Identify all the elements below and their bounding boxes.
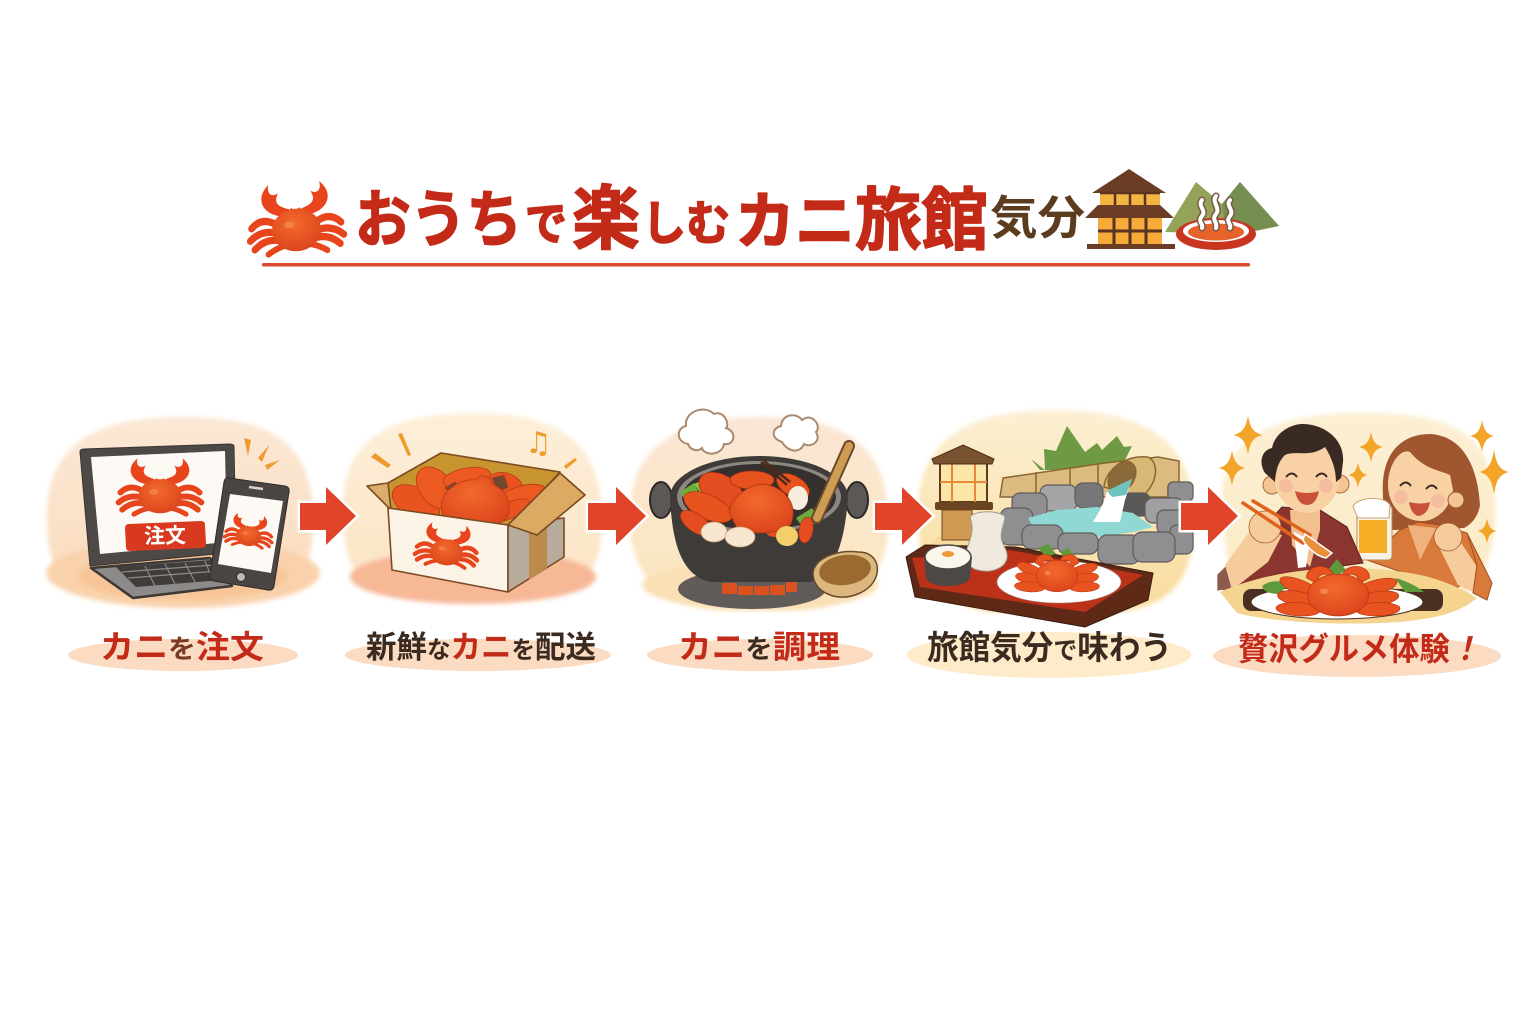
illustration: man bbox=[1218, 424, 1363, 590]
step label 1 bbox=[68, 629, 298, 671]
order button bbox=[125, 521, 206, 551]
icon: serving tray bbox=[906, 545, 1153, 627]
title text bbox=[355, 180, 1085, 259]
icon: waterfall bbox=[1093, 479, 1132, 522]
icon: bamboo water pipe bbox=[1000, 456, 1179, 498]
title text: おうち bbox=[355, 186, 522, 255]
order button: 注文 bbox=[144, 524, 186, 549]
icon: stove bbox=[678, 569, 826, 609]
icon: laptop bbox=[80, 444, 236, 598]
icon: attention rays bbox=[244, 438, 280, 470]
icon: mountains bbox=[1165, 182, 1279, 234]
step label 2: 新鮮なカニを配送 bbox=[366, 630, 596, 665]
icon: sparkle rays bbox=[371, 433, 577, 469]
title text: 楽 bbox=[572, 180, 640, 258]
step label 5: 贅沢グルメ体験！ bbox=[1238, 631, 1480, 667]
step label 1: カニを注文 bbox=[100, 629, 264, 665]
panel: order crab bbox=[46, 417, 320, 608]
step label 3 bbox=[647, 629, 873, 671]
icon: stone lantern bbox=[929, 445, 1000, 560]
icon: wooden bowl bbox=[813, 552, 877, 597]
step label 4 bbox=[907, 629, 1191, 678]
arrow 2 bbox=[588, 487, 646, 545]
icon: sake cup bbox=[924, 545, 972, 586]
panel: ryokan atmosphere bbox=[906, 410, 1194, 627]
arrow 1 bbox=[300, 487, 356, 545]
icon: green bushes bbox=[1031, 426, 1132, 470]
icon: sake bottle bbox=[966, 512, 1007, 571]
icon: crab bbox=[247, 179, 345, 256]
icon: sparkles bbox=[1219, 416, 1508, 544]
ladle handle fill bbox=[817, 446, 849, 518]
title text: 気分 bbox=[990, 192, 1085, 244]
icon: smartphone bbox=[210, 478, 289, 590]
arrow 4 bbox=[1181, 487, 1238, 545]
title text: 旅館 bbox=[855, 183, 988, 259]
icon: crab platter bbox=[1243, 559, 1443, 619]
panel: gourmet experience bbox=[1218, 413, 1508, 624]
panel: delivery bbox=[343, 413, 602, 604]
step label 3: カニを調理 bbox=[678, 629, 840, 665]
title text: カニ bbox=[735, 188, 855, 257]
icon: open box with crabs bbox=[367, 453, 585, 592]
icon: ryokan building bbox=[1085, 169, 1175, 249]
crab logo bbox=[414, 521, 481, 569]
title banner bbox=[247, 169, 1279, 266]
pot contents bbox=[676, 465, 820, 547]
step label 5 bbox=[1213, 631, 1501, 677]
title underline bbox=[262, 263, 1250, 266]
icon: music note: ♫ bbox=[525, 426, 552, 461]
title text: しむ bbox=[642, 197, 730, 250]
icon: crab plate bbox=[997, 544, 1121, 603]
icon: pot bbox=[650, 456, 868, 582]
panel: cooking bbox=[630, 410, 888, 610]
title text: で bbox=[525, 198, 567, 250]
icon: rock ring and pool bbox=[1000, 482, 1193, 564]
step label 4: 旅館気分で味わう bbox=[927, 629, 1172, 666]
illustration: table bbox=[1220, 568, 1477, 624]
icon: steam clouds bbox=[679, 410, 818, 454]
illustration: woman bbox=[1367, 434, 1492, 600]
crab logo bbox=[119, 458, 201, 514]
icon: hot spring bbox=[1176, 196, 1256, 250]
arrow 3 bbox=[875, 487, 932, 545]
icon: wooden ladle bbox=[817, 446, 849, 518]
illustration: beer mug bbox=[1353, 498, 1392, 560]
